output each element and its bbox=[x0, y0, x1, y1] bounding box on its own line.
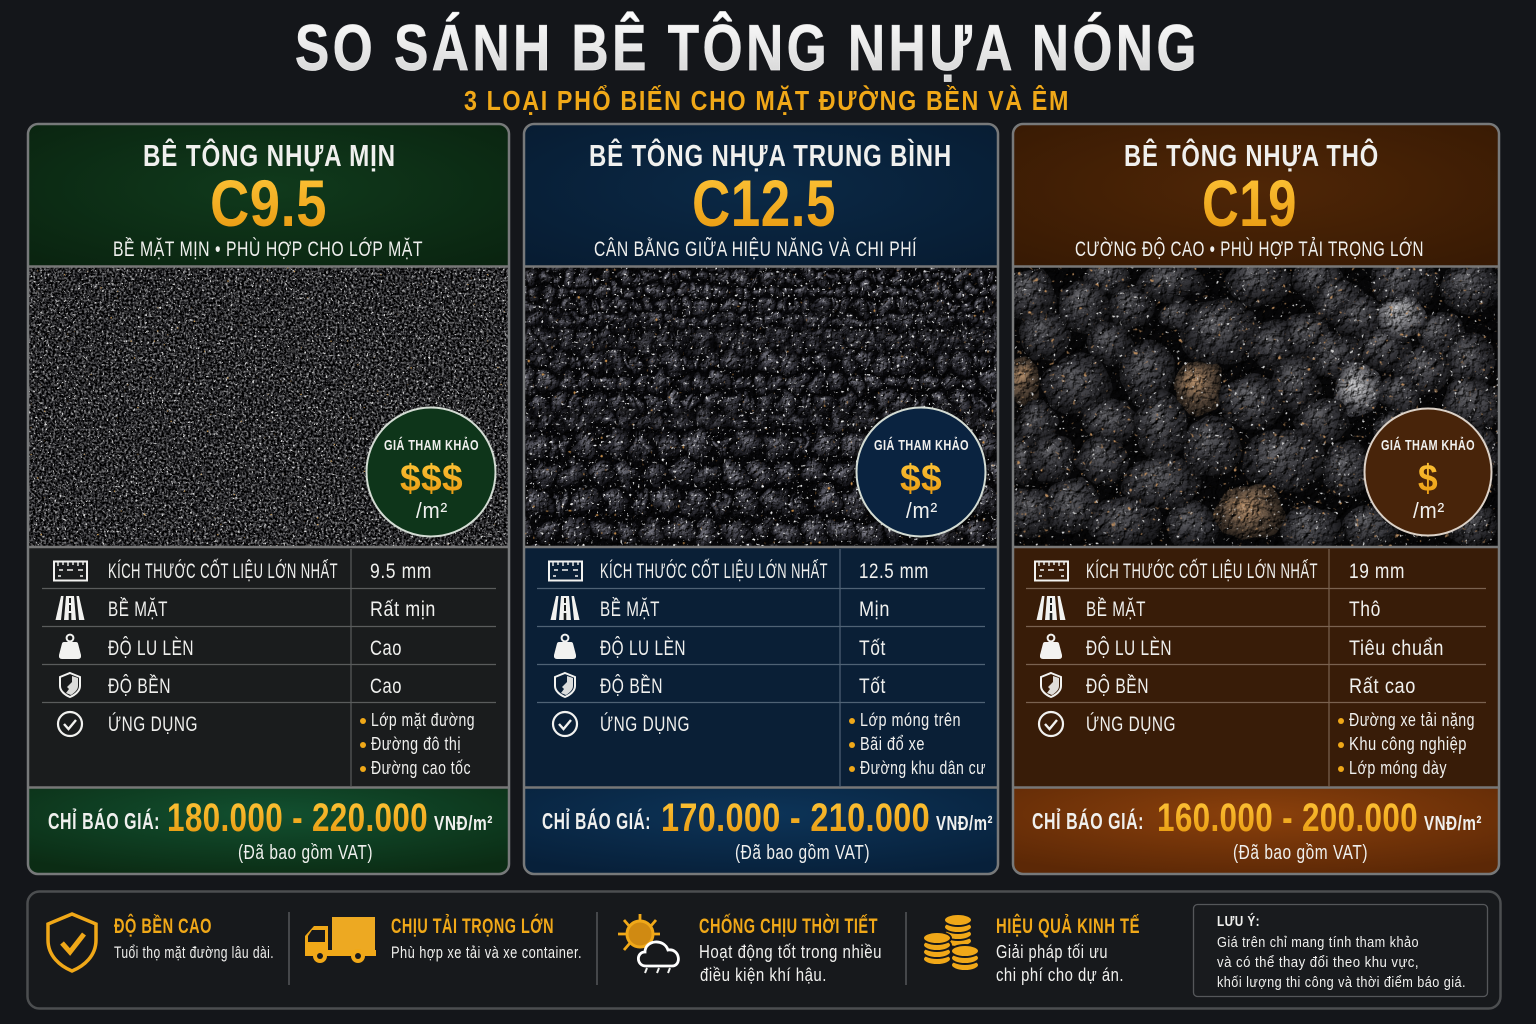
row: application: Đường khu dân cư bbox=[860, 758, 986, 778]
icon: shield with check bbox=[48, 914, 96, 971]
price badge: C9.5: /m² bbox=[416, 498, 448, 523]
row: application: Lớp móng dày bbox=[1349, 758, 1447, 778]
heading: C12.5 bbox=[589, 137, 952, 261]
price badge: C19 bbox=[1364, 408, 1492, 536]
row: compaction: Tốt bbox=[859, 637, 886, 660]
row: durability: ĐỘ BỀN bbox=[1086, 675, 1149, 698]
heading: C9.5: BÊ TÔNG NHỰA MỊN bbox=[143, 137, 396, 173]
row: compaction bbox=[1040, 635, 1444, 660]
note box bbox=[1194, 904, 1488, 996]
heading: C9.5: BỀ MẶT MỊN • PHÙ HỢP CHO LỚP MẶT bbox=[113, 238, 423, 261]
price badge: C19: $ bbox=[1418, 458, 1438, 500]
icon: truck bbox=[305, 917, 376, 963]
texture photo: medium aggregate bbox=[525, 268, 997, 546]
price: C9.5: (Đã bao gồm VAT) bbox=[238, 842, 373, 864]
price: C19: VNĐ/m² bbox=[1424, 813, 1482, 835]
row: surface bbox=[1036, 596, 1381, 621]
row: surface: Thô bbox=[1349, 598, 1381, 621]
price: C19 bbox=[1032, 796, 1482, 864]
price badge: C12.5: /m² bbox=[906, 498, 938, 523]
row: aggregate size: 19 mm bbox=[1349, 560, 1405, 583]
panel: C19 bbox=[990, 124, 1520, 874]
price: C12.5 bbox=[542, 796, 993, 864]
note box: khối lượng thi công và thời điểm báo giá. bbox=[1217, 974, 1466, 991]
price badge: C19: /m² bbox=[1413, 498, 1445, 523]
benefit: economic efficiency: chi phí cho dự án. bbox=[996, 965, 1124, 985]
heading: C12.5: C12.5 bbox=[692, 166, 836, 240]
price badge: C12.5: $$ bbox=[900, 458, 942, 500]
heading: C12.5: BÊ TÔNG NHỰA TRUNG BÌNH bbox=[589, 137, 952, 173]
header: C19 bbox=[1036, 126, 1477, 252]
row: compaction: ĐỘ LU LÈN bbox=[108, 637, 194, 660]
row: surface: BỀ MẶT bbox=[1086, 598, 1146, 621]
panel: benefits strip bbox=[28, 892, 1500, 1008]
spec table: C19 bbox=[1026, 549, 1486, 787]
row: application bbox=[553, 710, 986, 778]
row: application: Bãi đổ xe bbox=[860, 734, 925, 754]
row: compaction: ĐỘ LU LÈN bbox=[600, 637, 686, 660]
row: application: Đường xe tải nặng bbox=[1349, 710, 1475, 730]
row: application: Đường cao tốc bbox=[371, 758, 471, 778]
spec table: C12.5 bbox=[537, 549, 986, 787]
row: aggregate size: KÍCH THƯỚC CỐT LIỆU LỚN NHẤT bbox=[108, 559, 338, 583]
subtitle: 3 LOẠI PHỔ BIẾN CHO MẶT ĐƯỜNG BỀN VÀ ÊM bbox=[464, 85, 1070, 116]
panel: C9.5 bbox=[28, 124, 509, 874]
benefit: weather resistance bbox=[618, 914, 882, 985]
row: durability bbox=[1041, 673, 1416, 698]
row: surface: Mịn bbox=[859, 598, 890, 621]
texture photo: coarse aggregate bbox=[1014, 268, 1498, 546]
row: application: Lớp móng trên bbox=[860, 710, 961, 730]
panel: C12.5 bbox=[500, 124, 1020, 874]
price band: C12.5 bbox=[524, 788, 998, 874]
heading: C12.5: CÂN BẰNG GIỮA HIỆU NĂNG VÀ CHI PHÍ bbox=[594, 237, 917, 261]
benefit: durability: ĐỘ BỀN CAO bbox=[114, 914, 212, 938]
benefit: economic efficiency: Giải pháp tối ưu bbox=[996, 942, 1108, 962]
price: C12.5: (Đã bao gồm VAT) bbox=[735, 842, 870, 864]
benefit: weather resistance: điều kiện khí hậu. bbox=[700, 965, 827, 985]
benefit: heavy load: CHỊU TẢI TRỌNG LỚN bbox=[391, 914, 554, 938]
note box: và có thể thay đổi theo khu vực, bbox=[1217, 954, 1419, 971]
benefit: heavy load bbox=[305, 914, 582, 963]
price: C19: CHỈ BÁO GIÁ: bbox=[1032, 806, 1144, 834]
benefit: economic efficiency: HIỆU QUẢ KINH TẾ bbox=[996, 914, 1140, 938]
price: C9.5: 180.000 - 220.000 bbox=[167, 796, 428, 840]
row: durability: ĐỘ BỀN bbox=[600, 675, 663, 698]
row: durability: Rất cao bbox=[1349, 675, 1416, 698]
heading: C9.5: C9.5 bbox=[210, 166, 327, 240]
row: application: Khu công nghiệp bbox=[1349, 734, 1467, 754]
price: C19: (Đã bao gồm VAT) bbox=[1233, 842, 1368, 864]
note box: Giá trên chỉ mang tính tham khảo bbox=[1217, 934, 1419, 951]
row: compaction: Tiêu chuẩn bbox=[1349, 637, 1444, 660]
heading: C19: C19 bbox=[1202, 166, 1297, 240]
heading: C19: BÊ TÔNG NHỰA THÔ bbox=[1124, 137, 1379, 173]
row: compaction bbox=[554, 635, 886, 660]
price: C12.5: VNĐ/m² bbox=[936, 813, 993, 835]
row: compaction bbox=[59, 635, 402, 660]
row: application: Đường đô thị bbox=[371, 734, 461, 754]
price badge: C12.5: GIÁ THAM KHẢO bbox=[874, 437, 969, 454]
price: C9.5: VNĐ/m² bbox=[434, 813, 493, 835]
texture photo: fine asphalt bbox=[29, 267, 508, 546]
heading: C19 bbox=[1075, 137, 1424, 261]
benefit: durability: Tuổi thọ mặt đường lâu dài. bbox=[114, 943, 274, 962]
price band: C19 bbox=[1013, 788, 1499, 874]
row: surface bbox=[56, 596, 436, 621]
row: surface bbox=[550, 596, 890, 621]
header: C9.5 bbox=[28, 124, 509, 266]
row: aggregate size: KÍCH THƯỚC CỐT LIỆU LỚN NHẤT bbox=[600, 559, 828, 583]
row: aggregate size: 12.5 mm bbox=[859, 560, 929, 583]
benefit: durability bbox=[48, 914, 274, 971]
row: surface: BỀ MẶT bbox=[600, 598, 660, 621]
benefit: weather resistance: CHỐNG CHỊU THỜI TIẾT bbox=[699, 914, 878, 938]
price badge: C9.5: GIÁ THAM KHẢO bbox=[384, 437, 479, 454]
row: durability: Cao bbox=[370, 675, 402, 698]
row: application bbox=[58, 710, 475, 778]
row: application bbox=[1039, 710, 1475, 778]
price badge: C9.5: $$$ bbox=[400, 458, 463, 500]
title: SO SÁNH BÊ TÔNG NHỰA NÓNG bbox=[295, 11, 1200, 84]
icon: sun and rain cloud bbox=[618, 914, 678, 973]
price badge: C19: GIÁ THAM KHẢO bbox=[1381, 437, 1475, 454]
row: compaction: ĐỘ LU LÈN bbox=[1086, 637, 1172, 660]
price: C9.5: CHỈ BÁO GIÁ: bbox=[48, 806, 160, 834]
row: application: ỨNG DỤNG bbox=[108, 713, 198, 736]
price badge: C12.5 bbox=[856, 408, 986, 536]
price: C19: 160.000 - 200.000 bbox=[1157, 796, 1418, 840]
row: surface: BỀ MẶT bbox=[108, 598, 168, 621]
row: surface: Rất mịn bbox=[370, 598, 436, 621]
row: durability bbox=[60, 673, 402, 698]
row: application: ỨNG DỤNG bbox=[600, 713, 690, 736]
heading: C9.5 bbox=[113, 137, 423, 261]
row: aggregate size: KÍCH THƯỚC CỐT LIỆU LỚN NHẤT bbox=[1086, 559, 1318, 583]
row: compaction: Cao bbox=[370, 637, 402, 660]
benefit: weather resistance: Hoạt động tốt trong nhiều bbox=[699, 942, 882, 962]
row: application: Lớp mặt đường bbox=[371, 710, 475, 730]
price: C9.5 bbox=[48, 796, 493, 864]
row: application: ỨNG DỤNG bbox=[1086, 713, 1176, 736]
spec table: C9.5 bbox=[42, 549, 496, 787]
price badge: C9.5 bbox=[366, 408, 496, 536]
price: C12.5: CHỈ BÁO GIÁ: bbox=[542, 806, 651, 834]
row: durability bbox=[555, 673, 886, 698]
row: durability: Tốt bbox=[859, 675, 886, 698]
row: durability: ĐỘ BỀN bbox=[108, 675, 171, 698]
benefit: heavy load: Phù hợp xe tải và xe container. bbox=[391, 943, 582, 962]
note box: LƯU Ý: bbox=[1217, 912, 1260, 930]
price: C12.5: 170.000 - 210.000 bbox=[661, 796, 930, 840]
benefit: economic efficiency bbox=[923, 914, 1140, 985]
header: C12.5 bbox=[630, 149, 893, 228]
row: aggregate size: 9.5 mm bbox=[370, 560, 432, 583]
price band: C9.5 bbox=[28, 788, 509, 874]
icon: coin stacks bbox=[923, 914, 979, 971]
